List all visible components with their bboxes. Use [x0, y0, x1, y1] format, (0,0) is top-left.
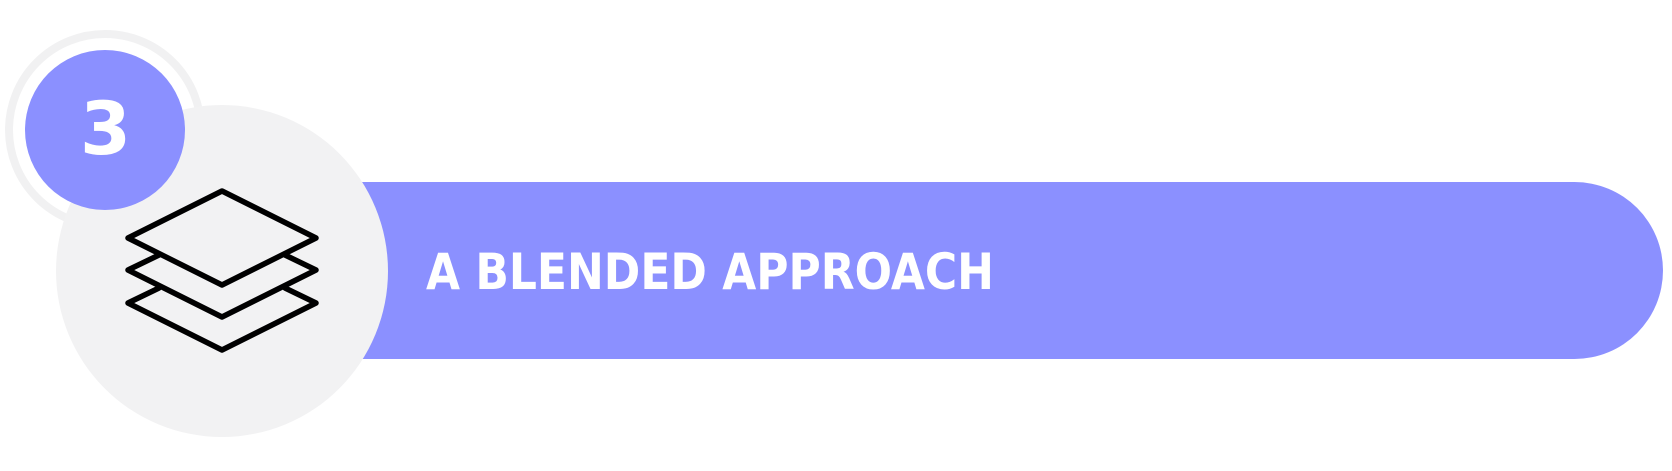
- title: A BLENDED APPROACH: [426, 243, 994, 301]
- banner bar: [300, 182, 1663, 359]
- number badge outer ring: [9, 34, 201, 226]
- icon: stacked layers: [128, 191, 316, 350]
- icon background circle: [56, 105, 388, 437]
- number badge: 3: [80, 87, 131, 172]
- number badge: [25, 50, 185, 210]
